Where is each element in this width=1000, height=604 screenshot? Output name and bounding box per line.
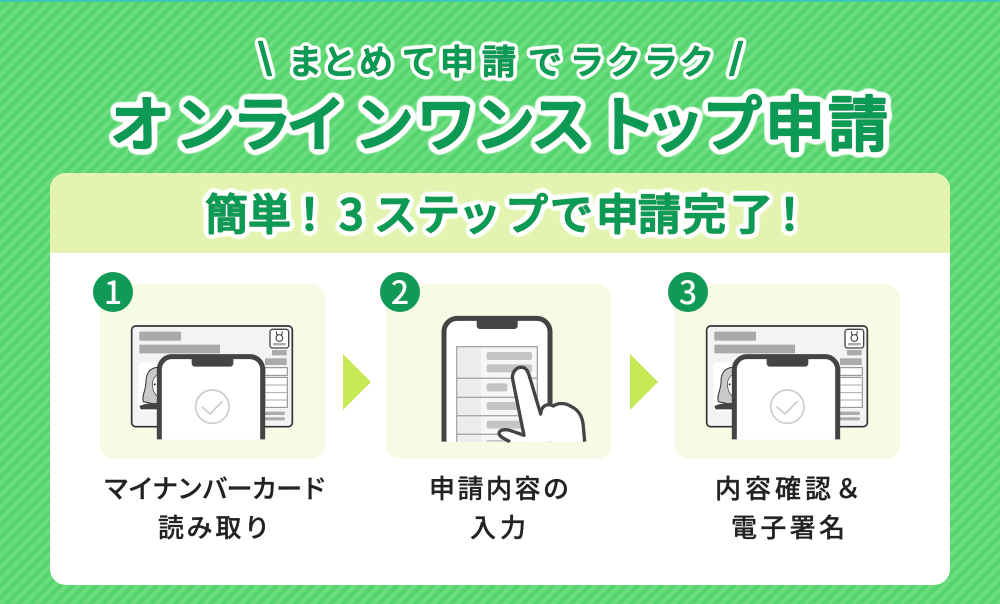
step 3 label <box>715 469 861 545</box>
step 3 panel <box>668 268 900 459</box>
step 2 label: 申請内容の <box>429 469 569 506</box>
step 1 label <box>103 469 327 545</box>
subtitle: / <box>730 33 743 85</box>
step 1 label: マイナンバーカード <box>103 469 327 506</box>
title: オンラインワンストップ申請 <box>110 77 888 164</box>
arrow: step 2 to 3 <box>630 354 658 410</box>
step 3 badge <box>668 268 708 314</box>
top edge line <box>0 0 1000 2</box>
step 1 label: 読み取り <box>158 508 270 545</box>
step 3 badge: 3 <box>679 268 697 314</box>
panel heading: 簡単！3ステップで申請完了！ <box>205 181 811 243</box>
step 2 badge: 2 <box>391 268 409 314</box>
subtitle: \ <box>259 33 272 85</box>
panel: steps card <box>50 173 950 585</box>
step 1 panel <box>93 268 325 459</box>
panel header band <box>50 173 950 253</box>
step 2 panel <box>380 268 611 459</box>
illustration: card and phone <box>132 326 292 439</box>
step 2 label <box>429 469 569 545</box>
step 1 badge: 1 <box>104 268 122 314</box>
step 2 label: 入力 <box>470 508 526 545</box>
subtitle: まとめて申請でラクラク <box>288 35 714 84</box>
illustration: phone form with tapping hand <box>444 317 585 442</box>
step 3 label: 内容確認＆ <box>715 469 861 506</box>
illustration: card and phone <box>707 326 867 439</box>
step 2 badge <box>380 268 420 314</box>
arrow: step 1 to 2 <box>343 354 371 410</box>
step 3 label: 電子署名 <box>731 508 845 545</box>
step 1 badge <box>93 268 133 314</box>
